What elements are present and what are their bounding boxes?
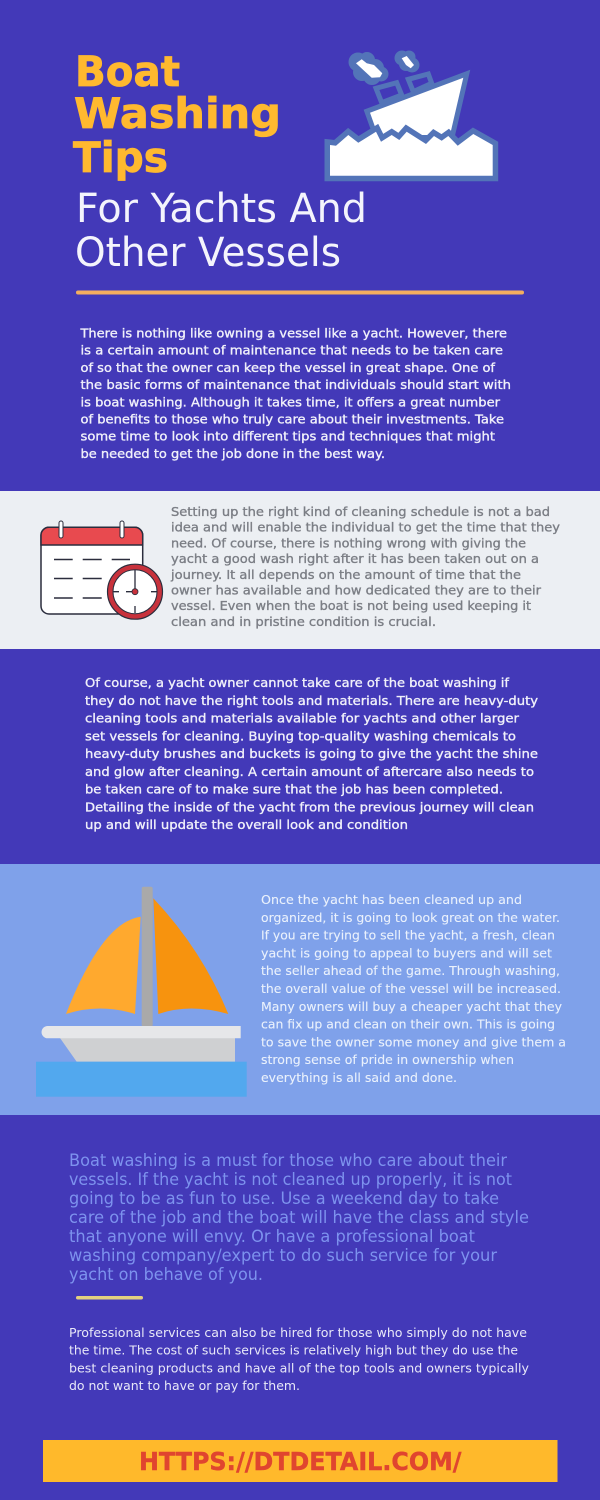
tools and materials paragraph: be taken care of to make sure that the job has been completed. — [85, 782, 503, 796]
short rule — [76, 1296, 143, 1300]
conclusion paragraph: vessels. If the yacht is not cleaned up properly, it is not — [69, 1170, 513, 1189]
conclusion paragraph: that anyone will envy. Or have a professional boat — [69, 1227, 476, 1246]
icon: sailboat — [36, 887, 247, 1097]
resale text: Many owners will buy a cheaper yacht that they — [261, 999, 563, 1014]
call to action banner: HTTPS://DTDETAIL.COM/ — [139, 1447, 462, 1476]
resale text: to save the owner some money and give them a — [261, 1034, 566, 1049]
professional services paragraph: best cleaning products and have all of the top tools and owners typically — [69, 1361, 529, 1375]
intro paragraph: some time to look into different tips and techniques that might — [80, 429, 495, 444]
icon: sinking ship — [330, 50, 493, 176]
tools and materials paragraph: set vessels for cleaning. Buying top-quality washing chemicals to — [85, 728, 516, 743]
intro paragraph: is a certain amount of maintenance that needs to be taken care — [80, 343, 503, 358]
resale text: If you are trying to sell the yacht, a fresh, clean — [261, 928, 555, 943]
subtitle: For Yachts And — [76, 186, 367, 232]
tools and materials paragraph — [85, 675, 539, 832]
resale text: the overall value of the vessel will be increased. — [261, 981, 561, 996]
schedule text: clean and in pristine condition is crucial. — [171, 614, 436, 629]
title — [73, 47, 281, 182]
conclusion paragraph: yacht on behave of you. — [69, 1265, 263, 1284]
resale text: strong sense of pride in ownership when — [261, 1052, 514, 1067]
conclusion paragraph: Boat washing is a must for those who care about their — [69, 1151, 507, 1170]
intro paragraph: of benefits to those who truly care about their investments. Take — [80, 412, 504, 426]
tools and materials paragraph: Detailing the inside of the yacht from the previous journey will clean — [85, 799, 534, 814]
title: Boat — [75, 47, 180, 96]
panel: resale value — [0, 864, 600, 1115]
intro paragraph: be needed to get the job done in the best way. — [80, 446, 385, 461]
schedule text: Setting up the right kind of cleaning schedule is not a bad — [171, 504, 550, 519]
intro paragraph: the basic forms of maintenance that individuals should start with — [80, 377, 511, 392]
resale text: can fix up and clean on their own. This is going — [261, 1017, 555, 1032]
icon: calendar and clock — [41, 521, 162, 619]
schedule text: yacht a good wash right after it has been taken out on a — [171, 551, 539, 566]
schedule text: need. Of course, there is nothing wrong with giving the — [171, 535, 526, 550]
schedule text — [170, 504, 561, 629]
schedule text: journey. It all depends on the amount of time that the — [170, 567, 521, 582]
tools and materials paragraph: they do not have the right tools and materials. There are heavy-duty — [85, 693, 539, 708]
conclusion paragraph: going to be as fun to use. Use a weekend day to take — [69, 1189, 499, 1208]
schedule text: idea and will enable the individual to get the time that they — [171, 520, 561, 535]
resale text: the seller ahead of the game. Through washing, — [261, 963, 560, 978]
resale text — [261, 892, 566, 1085]
professional services paragraph: the time. The cost of such services is relatively high but they do use the — [69, 1344, 518, 1358]
tools and materials paragraph: and glow after cleaning. A certain amount of aftercare also needs to — [85, 764, 534, 779]
intro paragraph: There is nothing like owning a vessel like a yacht. However, there — [79, 326, 507, 340]
conclusion paragraph — [69, 1151, 529, 1284]
professional services paragraph — [69, 1326, 529, 1393]
tools and materials paragraph: Of course, a yacht owner cannot take care of the boat washing if — [85, 675, 510, 690]
professional services paragraph: do not want to have or pay for them. — [69, 1379, 300, 1393]
intro paragraph — [79, 326, 511, 461]
conclusion paragraph: care of the job and the boat will have the class and style — [69, 1208, 529, 1227]
tools and materials paragraph: up and will update the overall look and condition — [85, 817, 408, 832]
resale text: Once the yacht has been cleaned up and — [261, 892, 522, 907]
panel: cleaning schedule — [0, 491, 600, 649]
tools and materials paragraph: heavy-duty brushes and buckets is going to give the yacht the shine — [85, 746, 538, 761]
resale text: everything is all said and done. — [261, 1070, 457, 1085]
tools and materials paragraph: cleaning tools and materials available for yachts and other larger — [85, 710, 520, 726]
schedule text: owner has available and how dedicated they are to their — [171, 582, 542, 598]
title: Tips — [73, 133, 168, 182]
professional services paragraph: Professional services can also be hired for those who simply do not have — [69, 1326, 527, 1340]
title: Washing — [74, 89, 281, 138]
schedule text: vessel. Even when the boat is not being used keeping it — [171, 598, 531, 613]
subtitle: Other Vessels — [75, 230, 341, 276]
resale text: yacht is going to appeal to buyers and will set — [261, 945, 552, 960]
intro paragraph: of so that the owner can keep the vessel in great shape. One of — [80, 360, 496, 375]
resale text: organized, it is going to look great on the water. — [261, 910, 560, 925]
subtitle — [75, 186, 367, 276]
conclusion paragraph: washing company/expert to do such service for your — [69, 1246, 497, 1265]
intro paragraph: is boat washing. Although it takes time, it offers a great number — [80, 394, 501, 409]
title rule — [76, 290, 524, 294]
call to action banner — [43, 1440, 558, 1482]
